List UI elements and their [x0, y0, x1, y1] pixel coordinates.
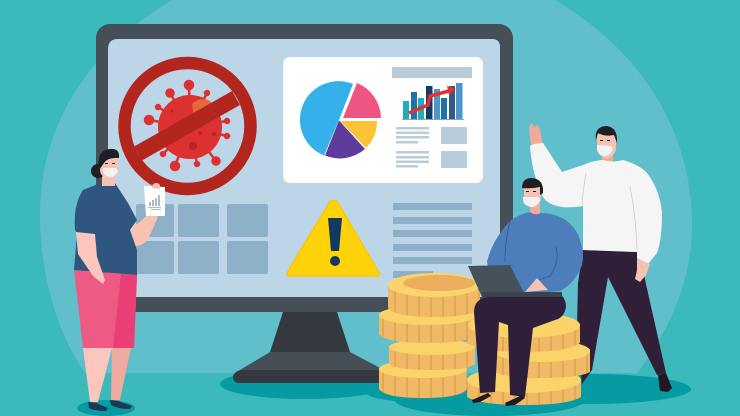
trend arrow [409, 91, 449, 113]
prohibition slash [138, 98, 236, 154]
report sheet [144, 186, 165, 216]
coin [379, 305, 477, 343]
hair [98, 149, 119, 170]
shoes [110, 400, 132, 409]
shoes [472, 393, 491, 403]
lower hand [635, 258, 650, 282]
virus icon [145, 81, 229, 170]
arm [76, 232, 105, 284]
coin stack right [467, 312, 590, 405]
coin [467, 367, 581, 405]
sweater [530, 143, 662, 264]
legs [83, 348, 112, 402]
monitor [96, 24, 513, 383]
panel: charts [283, 57, 483, 183]
tile grid [136, 204, 268, 274]
mask [597, 145, 613, 156]
man standing [529, 123, 672, 392]
prohibition ring [124, 63, 250, 189]
woman holding report [74, 149, 165, 411]
monitor screen [108, 39, 500, 297]
bar chart [402, 83, 464, 120]
shirt [74, 183, 137, 275]
skirt shade [113, 274, 137, 348]
floor shadows [77, 369, 691, 416]
raised forearm [130, 212, 158, 246]
man sitting with laptop [468, 178, 583, 406]
text lines on screen [393, 203, 472, 278]
raised hand [529, 123, 543, 146]
trousers [474, 292, 566, 397]
face [524, 186, 541, 207]
face [597, 134, 616, 158]
icon: warning triangle [287, 200, 379, 276]
hands [525, 278, 548, 292]
eyes [526, 191, 536, 192]
coin [467, 312, 580, 352]
hair [522, 178, 543, 195]
chart title bar [392, 67, 472, 78]
panel background [283, 57, 483, 183]
text lines and boxes [396, 127, 467, 168]
coin [379, 360, 467, 398]
trousers [577, 250, 666, 384]
monitor stand [233, 312, 384, 383]
laptop [468, 265, 562, 297]
shoes [505, 395, 525, 406]
sweater folds [505, 221, 557, 281]
pie chart [300, 81, 381, 158]
hair [596, 126, 617, 143]
coin [494, 340, 590, 378]
neck [602, 152, 613, 166]
coin stack left [379, 273, 480, 398]
neck [102, 175, 115, 186]
shoe [658, 373, 672, 392]
prohibited virus sign [124, 63, 250, 189]
hand [152, 183, 160, 189]
sweater [487, 212, 583, 294]
neck [530, 203, 540, 216]
eyes [105, 163, 115, 164]
hair bun [91, 164, 105, 178]
coin [388, 273, 480, 317]
face [100, 158, 118, 179]
back leg [111, 348, 131, 400]
eyes [600, 140, 610, 141]
shoes [88, 402, 108, 411]
mask [103, 168, 118, 177]
monitor frame [96, 24, 513, 312]
mask [523, 197, 540, 207]
coin [389, 339, 475, 370]
sweater folds [582, 173, 637, 250]
skirt [74, 270, 137, 348]
